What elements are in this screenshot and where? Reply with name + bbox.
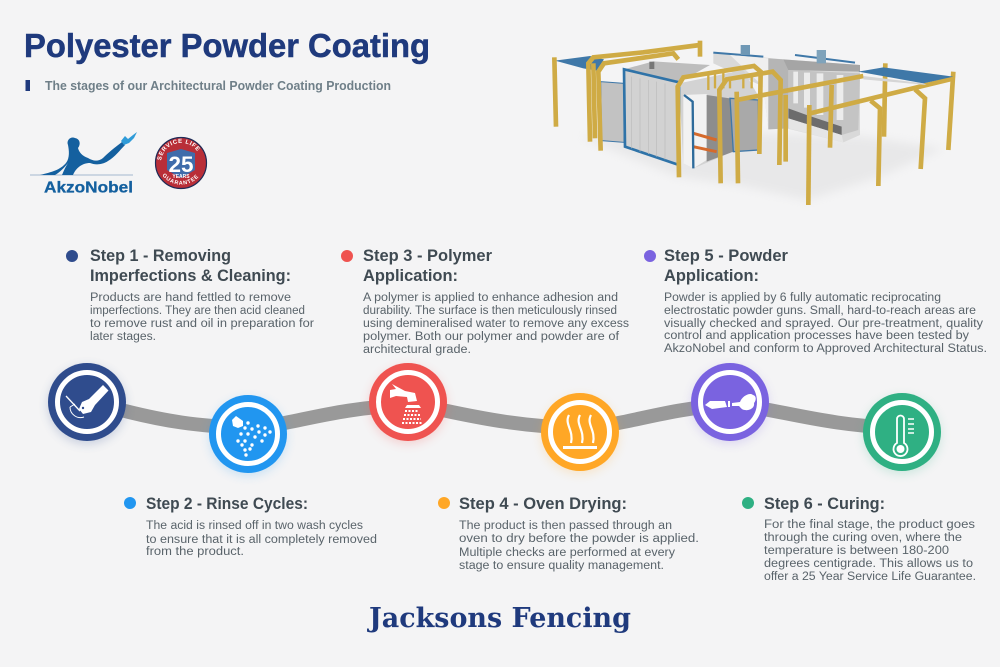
timeline road xyxy=(87,405,902,428)
step 5 text xyxy=(644,247,987,355)
rear booth unit xyxy=(713,45,860,142)
step 3 text: polymer. Both our polymer and powder are of xyxy=(363,331,620,343)
step 5 text: Powder is applied by 6 fully automatic reciprocating xyxy=(664,292,941,304)
step 2 text xyxy=(124,495,377,558)
step 1 text: imperfections. They are then acid cleaned xyxy=(90,305,305,317)
step 1 text: Imperfections & Cleaning: xyxy=(90,267,291,285)
front yellow frames xyxy=(678,66,954,205)
logo: AkzoNobel: AkzoNobel xyxy=(44,180,133,196)
step 4 text: oven to dry before the powder is applied. xyxy=(459,533,699,545)
step 1 text: Step 1 - Removing xyxy=(90,247,231,265)
open booth interior xyxy=(679,70,761,168)
step 6 icon: thermometer xyxy=(863,393,941,474)
illustration: powder coating plant xyxy=(554,41,954,205)
logo: AkzoNobel xyxy=(30,132,137,196)
step 2 icon: shower xyxy=(209,395,287,476)
step 4 icon: heat xyxy=(541,393,619,474)
step 3 text: A polymer is applied to enhance adhesion and xyxy=(363,292,618,304)
step 5 text: AkzoNobel and conform to Approved Architectural Status. xyxy=(664,343,987,355)
step 2 text: from the product. xyxy=(146,546,244,558)
step 3 text: Step 3 - Polymer xyxy=(363,247,493,265)
subtitle: The stages of our Architectural Powder Coating Production xyxy=(45,79,391,93)
ground shadow xyxy=(580,133,943,200)
badge: 25 year service life guarantee: YEARS xyxy=(172,174,190,180)
step 5 text: Application: xyxy=(664,267,759,285)
left canopy xyxy=(555,56,604,71)
step 6 text: degrees centigrade. This allows us to xyxy=(764,558,973,570)
badge: 25 year service life guarantee xyxy=(154,136,208,190)
step 3 text: Application: xyxy=(363,267,458,285)
step 3 icon: spray rinse xyxy=(369,363,447,444)
step 3 text: architectural grade. xyxy=(363,344,471,356)
step 4 text: Multiple checks are performed at every xyxy=(459,547,675,559)
step 2 text: The acid is rinsed off in two wash cycles xyxy=(146,520,363,532)
step 2 text: Step 2 - Rinse Cycles: xyxy=(146,495,308,513)
step 1 icon: angle grinder xyxy=(48,363,126,444)
badge: 25 year service life guarantee: SERVICE LIFE xyxy=(157,138,200,160)
step 2 text: to ensure that it is all completely removed xyxy=(146,534,377,546)
right canopy xyxy=(858,67,953,83)
step 6 text: Step 6 - Curing: xyxy=(764,495,885,513)
step 6 text: For the final stage, the product goes xyxy=(764,519,975,531)
step 6 text: temperature is between 180-200 xyxy=(764,545,949,557)
step 6 text: offer a 25 Year Service Life Guarantee. xyxy=(764,571,976,583)
step 5 text: Step 5 - Powder xyxy=(664,247,789,265)
step 3 text: using demineralised water to remove any excess xyxy=(363,318,629,330)
step 4 text xyxy=(438,495,699,572)
step 1 text: later stages. xyxy=(90,331,156,343)
step 3 text xyxy=(341,247,629,356)
step 1 text xyxy=(66,247,314,343)
rear yellow frames xyxy=(554,41,885,142)
step 5 text: visually checked and sprayed. Our pre-treatment, quality xyxy=(664,318,983,330)
step 1 text: to remove rust and oil in preparation for xyxy=(90,318,314,330)
step 6 text: through the curing oven, where the xyxy=(764,532,962,544)
step 5 icon: powder gun xyxy=(691,363,769,444)
footer logo: Jacksons Fencing: Jacksons Fencing xyxy=(367,603,631,634)
title: Polyester Powder Coating xyxy=(24,27,430,64)
step 3 text: durability. The surface is then meticulously rinsed xyxy=(363,305,617,317)
step 4 text: stage to ensure quality management. xyxy=(459,560,664,572)
step 5 text: electrostatic powder guns. Small, hard-to-reach areas are xyxy=(664,305,976,317)
step 4 text: The product is then passed through an xyxy=(459,520,672,532)
main container xyxy=(624,61,710,165)
badge: 25 year service life guarantee: GUARANTEE xyxy=(162,174,198,185)
step 5 text: control and application processes have been tested by xyxy=(664,330,969,342)
badge: 25 year service life guarantee: 25 xyxy=(168,152,194,177)
step 1 text: Products are hand fettled to remove xyxy=(90,292,291,304)
step 4 text: Step 4 - Oven Drying: xyxy=(459,495,627,513)
step 6 text xyxy=(742,495,976,583)
